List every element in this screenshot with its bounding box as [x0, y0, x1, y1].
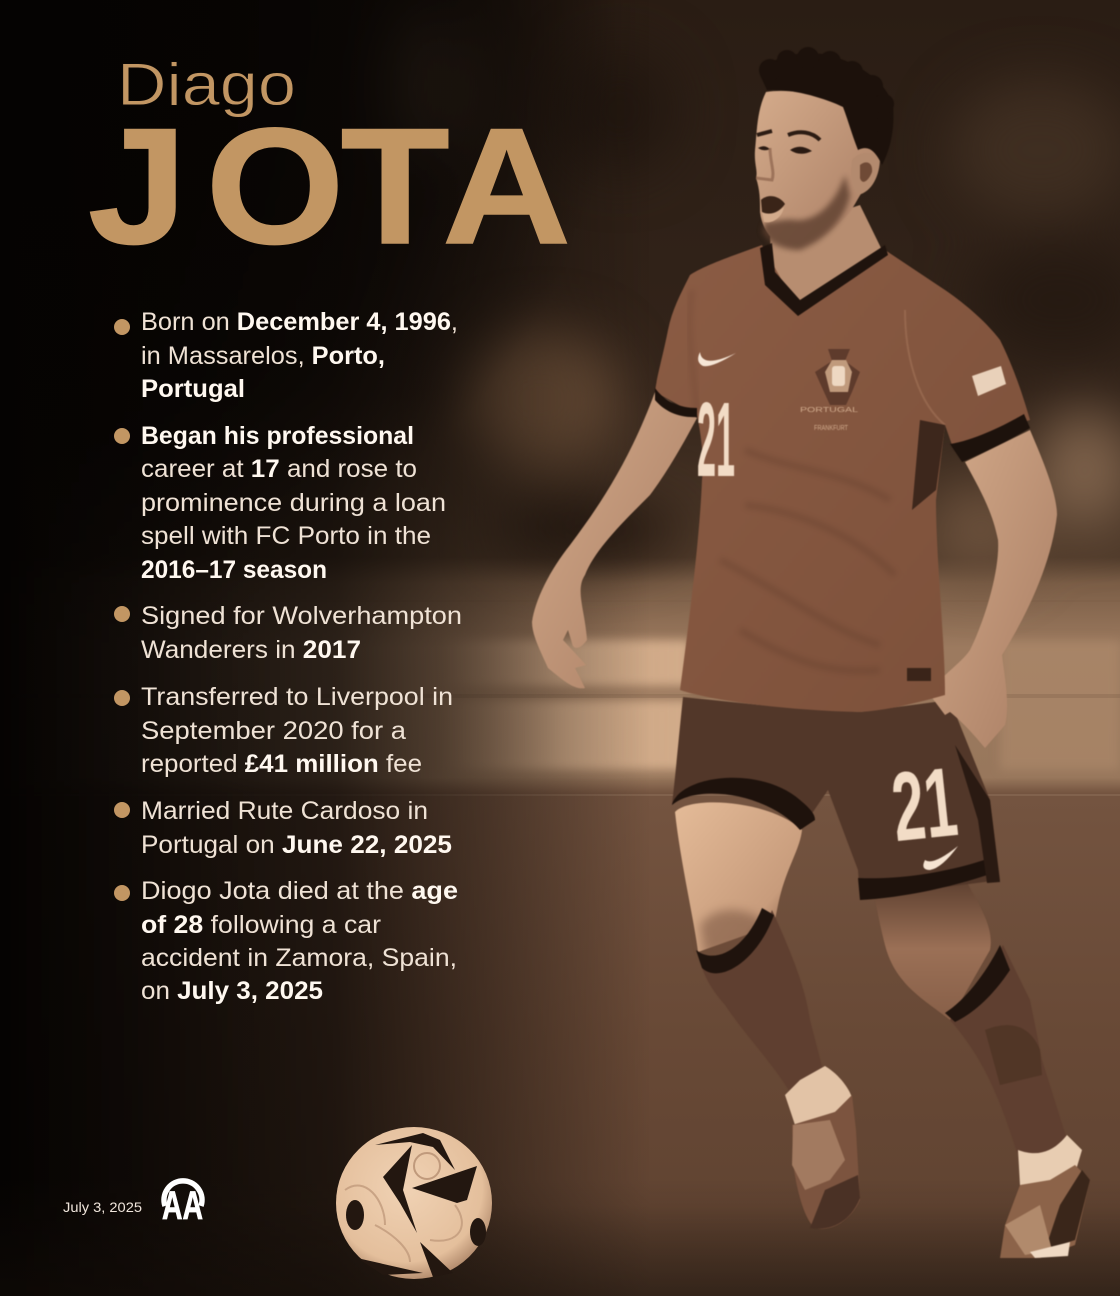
sleeve badge	[972, 366, 1006, 396]
bullet: Liverpool: reported £41 million fee	[141, 750, 422, 778]
bullet: birth: Portugal	[141, 375, 245, 403]
left leg	[675, 802, 860, 1229]
head	[755, 47, 894, 250]
shirt: 21	[697, 381, 735, 499]
bullet: death	[114, 877, 458, 1005]
bullet: death: of 28 following a car	[141, 911, 381, 939]
shorts	[672, 697, 1000, 900]
bullet: Wolves	[114, 602, 462, 664]
bullet: Wolves: Signed for Wolverhampton	[141, 602, 462, 630]
grass at the bottom	[0, 1180, 1120, 1296]
right arm	[930, 430, 1057, 748]
last name: JOTA	[88, 95, 571, 279]
sleeve cuffs	[655, 388, 697, 417]
bullet: career start: prominence during a loan	[141, 489, 446, 517]
swoosh	[698, 352, 736, 366]
bullet: career start: spell with FC Porto in the	[141, 522, 431, 550]
bullet: Liverpool: September 2020 for a	[141, 717, 406, 745]
shorts swoosh	[923, 846, 958, 870]
date: July 3, 2025	[63, 1199, 142, 1215]
bullet: birth: in Massarelos, Porto,	[141, 342, 385, 370]
bullet: career start: 2016–17 season	[141, 556, 327, 584]
shorts number: 21	[887, 746, 962, 862]
bullet: birth	[114, 308, 458, 403]
mouth	[761, 196, 785, 214]
bullet: career start	[114, 422, 446, 584]
shirt	[655, 243, 1030, 712]
bullet: career start: career at 17 and rose to	[141, 455, 417, 483]
bullet: career start: Began his professional	[141, 422, 414, 450]
Anadolu Agency logo: AA	[162, 1184, 203, 1228]
bullet: death: on July 3, 2025	[141, 977, 323, 1005]
bullet: death: Diogo Jota died at the age	[141, 877, 458, 905]
biography bullet list	[114, 308, 462, 1005]
title	[88, 51, 571, 279]
ear	[851, 153, 880, 195]
commemorative text under crest: PORTUGAL	[800, 407, 858, 414]
bullet: marriage: Married Rute Cardoso in	[141, 797, 428, 825]
right leg	[875, 878, 1090, 1258]
shirt: FRANKFURT	[814, 425, 849, 432]
crest	[815, 349, 860, 405]
collar	[760, 243, 888, 316]
left arm	[532, 392, 697, 688]
Anadolu Agency logo	[162, 1181, 203, 1228]
hair	[759, 47, 894, 165]
fabric folds	[720, 450, 895, 671]
bullet: death: accident in Zamora, Spain,	[141, 944, 457, 972]
neck	[770, 205, 882, 312]
beard	[762, 175, 850, 250]
bullet: marriage: Portugal on June 22, 2025	[141, 831, 452, 859]
eyes and brows	[757, 131, 820, 140]
bullet: Wolves: Wanderers in 2017	[141, 636, 361, 664]
bullet: birth: Born on December 4, 1996,	[141, 308, 458, 336]
nose shadow	[756, 148, 773, 180]
football	[336, 1127, 492, 1279]
bullet: Liverpool	[114, 683, 453, 778]
waist label	[907, 668, 931, 681]
football player	[532, 47, 1090, 1258]
bullet: marriage	[114, 797, 452, 859]
first name: Diago	[117, 51, 296, 118]
bullet: Liverpool: Transferred to Liverpool in	[141, 683, 453, 711]
